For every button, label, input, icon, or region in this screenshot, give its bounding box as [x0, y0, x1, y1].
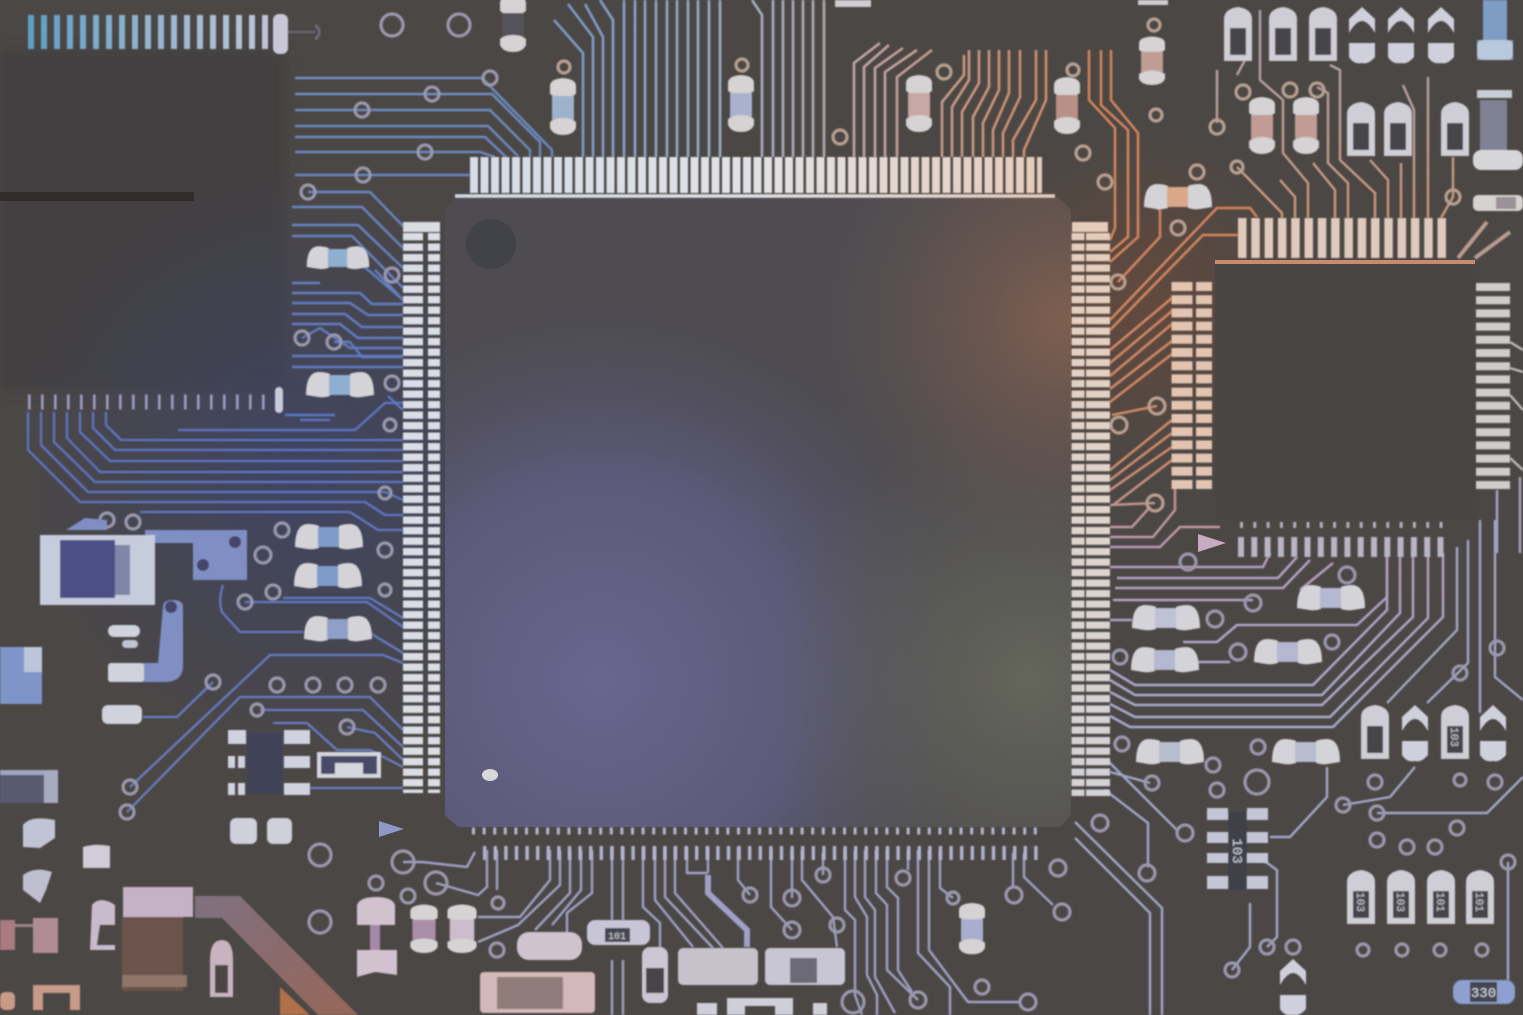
traces: right of main chip: [1089, 50, 1443, 727]
components: upper row: [500, 0, 1212, 209]
secondary chip right pins: [1476, 283, 1510, 492]
mid-left connector pins: [28, 387, 283, 413]
main chip: [445, 197, 1071, 827]
bottom-centre components: [357, 897, 985, 1015]
main chip right pins: [1072, 222, 1108, 796]
traces: top centre and upper right of chip: [554, 0, 1046, 157]
traces: middle left bundle: [28, 403, 403, 530]
house labels: 103: [1393, 892, 1405, 912]
small chip marker: [482, 769, 498, 781]
pin-one dimple: [466, 219, 516, 269]
house labels: [1353, 727, 1484, 912]
house labels: 101: [1472, 892, 1484, 912]
IC labelled 103: [1207, 808, 1268, 890]
secondary chip bottom pins: [1238, 525, 1446, 547]
traces: lower left: [127, 585, 403, 812]
IC labelled 103: 103: [1228, 838, 1244, 864]
dark stripe: [0, 192, 194, 201]
house labels: 103: [1447, 727, 1459, 747]
house labels: 101: [1433, 892, 1445, 912]
label 101: 101: [608, 932, 626, 943]
triangle marker lower left: [379, 821, 404, 837]
small IC lower left: [228, 730, 379, 795]
bottom-left components: [0, 770, 292, 950]
secondary chip top pins: [1238, 218, 1446, 258]
secondary chip left pins: [1182, 282, 1204, 492]
house labels: 103: [1353, 892, 1365, 912]
traces: lower right: [1075, 477, 1523, 1015]
traces: upper right cluster: [1217, 10, 1523, 470]
resistor labelled 330: 330: [1471, 986, 1496, 1002]
secondary chip: [1215, 260, 1479, 520]
components: left resistors: [294, 246, 374, 641]
main chip left pins: [403, 222, 440, 793]
components: upper right cluster: [1224, 0, 1523, 211]
main chip top pins: [455, 175, 1055, 196]
triangle marker: [1198, 534, 1226, 552]
lower-right houses: [1280, 705, 1506, 1015]
lower-right resistors: [1131, 585, 1365, 764]
copper pad and big capacitor: [0, 887, 358, 1015]
traces: upper left: [285, 78, 552, 415]
via rings, warm side: [558, 19, 1460, 511]
capacitor block lower left: [0, 518, 247, 724]
top-left connector pins: [28, 14, 319, 54]
resistor labelled 330: [1453, 980, 1515, 1004]
main chip bottom pins: [472, 831, 1040, 853]
traces: bottom: [403, 847, 1053, 1015]
